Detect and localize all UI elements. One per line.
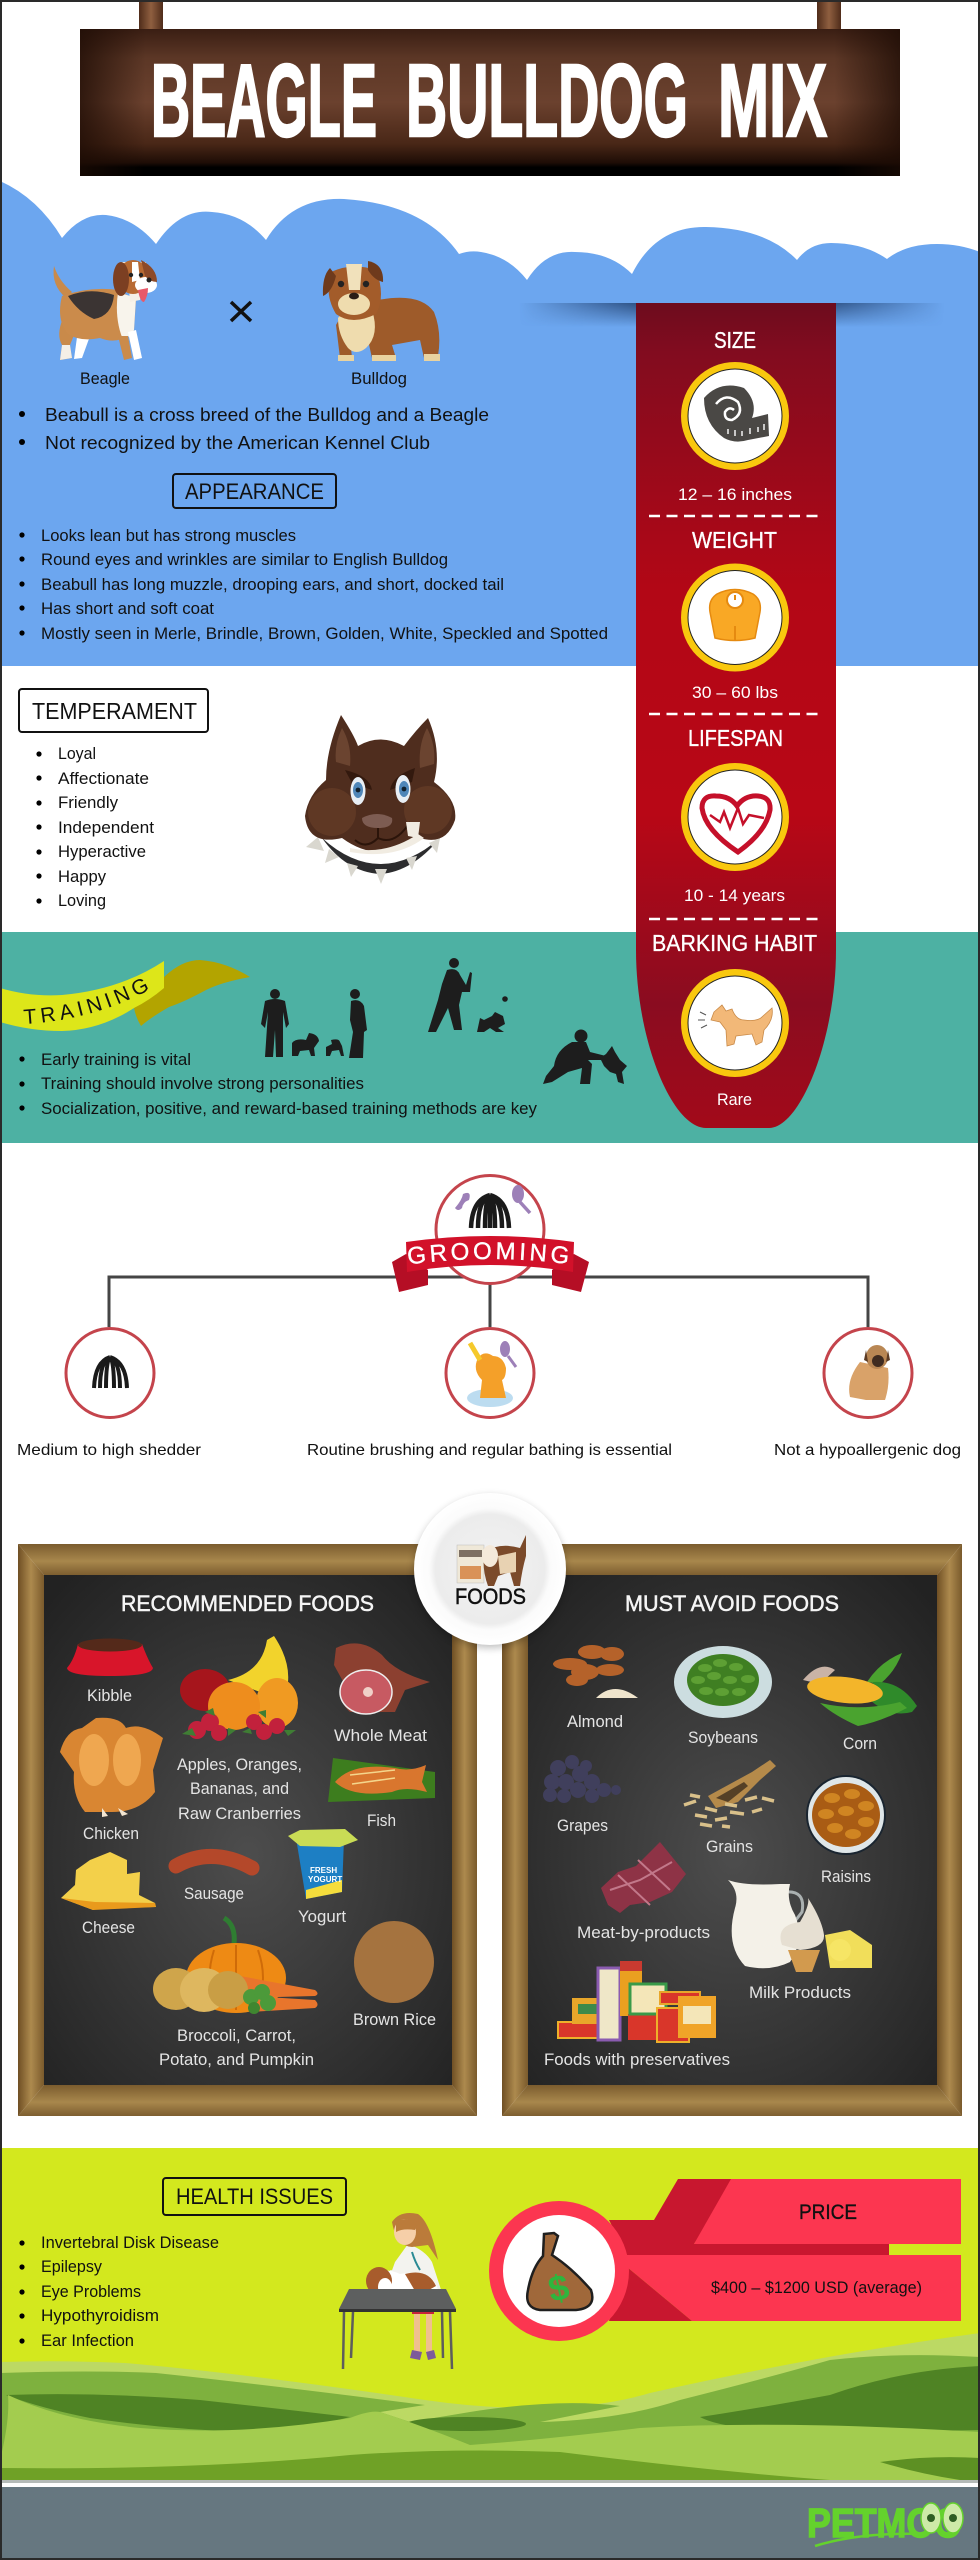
text block: temperament list: Happy <box>58 868 107 886</box>
label: milk products: Milk Products <box>749 1983 851 2002</box>
label: vegetables: Potato, and Pumpkin <box>159 2050 314 2069</box>
heading: health issues: HEALTH ISSUES <box>176 2184 333 2209</box>
label: yogurt: Yogurt <box>298 1907 346 1926</box>
food: yogurt cup: FRESH <box>310 1866 337 1875</box>
icon: grooming main circle <box>436 1176 544 1284</box>
text block: training list: Socialization, positive, and reward-based training methods are key <box>41 1100 538 1118</box>
heading: appearance <box>173 474 336 508</box>
label: meat by-products: Meat-by-products <box>577 1923 710 1942</box>
text block: training list: Early training is vital <box>41 1051 191 1069</box>
label: vegetables: Broccoli, Carrot, <box>177 2026 296 2045</box>
title: BEAGLE <box>151 43 377 158</box>
label: kibble: Kibble <box>87 1686 132 1705</box>
text block: health list: Eye Problems <box>41 2283 141 2301</box>
label: sausage: Sausage <box>184 1884 244 1903</box>
icon: puppy <box>482 1535 526 1586</box>
grooming item: brushing and bathing <box>307 1328 672 1459</box>
divider dashes <box>649 713 822 715</box>
food: almonds <box>553 1645 638 1698</box>
silhouette: man throwing ball <box>428 958 508 1032</box>
stat: size: SIZE <box>714 327 756 353</box>
food: cheese <box>61 1852 156 1910</box>
heading: appearance: APPEARANCE <box>185 479 324 504</box>
text block: appearance list <box>19 527 608 643</box>
ribbon body <box>636 303 836 1128</box>
panel: stats ribbon <box>519 303 944 1128</box>
panel: recommended foods board <box>18 1544 477 2116</box>
grooming item: not hypoallergenic: Not a hypoallergenic dog <box>774 1442 961 1459</box>
stat: barking habit <box>652 930 817 1109</box>
food: preserved goods <box>558 1961 716 2042</box>
label: fish: Fish <box>367 1811 396 1830</box>
heading: temperament: TEMPERAMENT <box>32 698 197 724</box>
food: fruit pile <box>180 1636 298 1741</box>
sign posts <box>139 0 841 30</box>
food: milk products <box>728 1880 872 1972</box>
label: grains: Grains <box>706 1837 753 1856</box>
label: cheese: Cheese <box>82 1918 135 1937</box>
lime background <box>0 2148 980 2480</box>
label: FOODS: FOODS <box>455 1584 526 1609</box>
text block: appearance list: Mostly seen in Merle, Brindle, Brown, Golden, White, Speckled and Spotted <box>41 625 608 643</box>
stat: barking habit: BARKING HABIT <box>652 930 817 956</box>
text block: health list <box>19 2234 219 2350</box>
icon: puppy food bag <box>457 1545 484 1583</box>
title: BULLDOG <box>406 43 688 158</box>
grooming ribbon banner <box>392 1236 589 1292</box>
text block: appearance list: Beabull has long muzzle, drooping ears, and short, docked tail <box>41 576 504 594</box>
text block: health list: Epilepsy <box>41 2258 103 2276</box>
price value: $400 – $1200 USD (average) <box>711 2279 922 2297</box>
label: brown rice: Brown Rice <box>353 2010 436 2029</box>
icon: tape measure <box>681 362 789 470</box>
label: fruit <box>177 1755 302 1823</box>
green hills <box>0 2333 980 2480</box>
text block: temperament list: Loving <box>58 892 106 910</box>
label: vegetables <box>159 2026 314 2069</box>
silhouette: man with dogs <box>261 989 367 1058</box>
label: corn: Corn <box>843 1734 877 1753</box>
icon: money bag circle <box>489 2201 629 2341</box>
chalkboard <box>44 1575 452 2085</box>
label: fruit: Bananas, and <box>190 1779 289 1798</box>
text block: intro bullets: Beabull is a cross breed of the Bulldog and a Beagle <box>45 404 489 425</box>
stat: lifespan: 10 - 14 years <box>684 886 785 905</box>
grooming item: not hypoallergenic <box>774 1328 961 1459</box>
text block: intro bullets <box>19 404 489 453</box>
label: fruit: Raw Cranberries <box>178 1804 301 1823</box>
food: vegetables <box>153 1918 318 2014</box>
food: raisins bowl <box>807 1776 885 1854</box>
text block: health list: Ear Infection <box>41 2332 134 2350</box>
icon: heart pulse <box>681 763 789 871</box>
label: chicken: Chicken <box>83 1824 139 1843</box>
training banner: TRAINING <box>23 979 148 1024</box>
icon: scale <box>681 564 789 672</box>
divider dashes <box>649 515 822 517</box>
wooden frame <box>502 1544 962 2116</box>
price heading: PRICE <box>799 2201 857 2224</box>
grooming item: shedder: Medium to high shedder <box>17 1442 202 1459</box>
food: grapes <box>543 1755 621 1803</box>
icon: money bag circle: $ <box>544 2266 573 2310</box>
label: Bulldog: Bulldog <box>351 370 407 388</box>
stat: size <box>678 327 792 504</box>
food: yogurt cup <box>288 1829 358 1899</box>
grooming item: brushing and bathing: Routine brushing and regular bathing is essential <box>307 1442 672 1459</box>
text block: temperament list: Independent <box>58 819 154 837</box>
text block: training list: Training should involve strong personalities <box>41 1075 364 1093</box>
blue cloud panel <box>0 181 980 666</box>
food: brown rice <box>354 1921 434 2003</box>
stat: barking habit: Rare <box>717 1090 752 1109</box>
food: sausage <box>176 1856 252 1868</box>
illustration: vet and dog on table <box>339 2213 456 2369</box>
title: MIX <box>718 43 827 158</box>
food: whole meat <box>334 1643 430 1714</box>
ribbon front <box>0 961 164 1031</box>
text block: appearance list: Has short and soft coat <box>41 600 214 618</box>
label: almond: Almond <box>567 1712 623 1731</box>
badge: foods plate <box>414 1493 566 1648</box>
grooming item: shedder <box>17 1328 202 1459</box>
label: preserved goods: Foods with preservatives <box>544 2050 730 2069</box>
food: soybeans bowl <box>674 1646 772 1718</box>
sign board <box>80 29 900 176</box>
heading: health issues <box>163 2178 346 2215</box>
grooming section <box>17 1174 961 1459</box>
icon: barking dog <box>681 969 789 1077</box>
text block: training list <box>19 1051 538 1118</box>
text block: temperament list: Friendly <box>58 794 119 812</box>
training banner <box>2 960 250 1031</box>
ribbon fold <box>134 960 250 1026</box>
footer band with logo <box>0 2480 980 2560</box>
text block: health list: Invertebral Disk Disease <box>41 2234 219 2252</box>
top shadow <box>528 303 936 326</box>
wooden frame <box>18 1544 477 2116</box>
label: soybeans: Soybeans <box>688 1728 758 1747</box>
icon: cross mark <box>231 302 251 321</box>
stat: weight <box>681 527 789 702</box>
text block: temperament list: Loyal <box>58 745 96 763</box>
label: Beagle: Beagle <box>80 370 130 388</box>
connector lines <box>109 1277 868 1327</box>
stat: lifespan <box>681 725 789 905</box>
divider dashes <box>649 918 822 920</box>
label: grapes: Grapes <box>557 1816 608 1835</box>
icon: angry dog head <box>305 715 455 884</box>
stat: weight: WEIGHT <box>692 527 777 553</box>
food: meat by-products <box>601 1842 686 1913</box>
teal training band <box>0 932 980 1143</box>
label: fruit: Apples, Oranges, <box>177 1755 302 1774</box>
stat: weight: 30 – 60 lbs <box>692 683 778 702</box>
hanging sign with title <box>80 0 900 176</box>
label: whole meat: Whole Meat <box>334 1726 427 1745</box>
TRAINING label <box>24 950 210 1024</box>
food: yogurt cup: YOGURT <box>308 1875 342 1884</box>
icon: bulldog <box>323 261 440 361</box>
icon: beagle <box>54 260 157 360</box>
heading: recommended foods: RECOMMENDED FOODS <box>121 1591 374 1616</box>
logo: PETMOO: PETMOO <box>807 2500 962 2546</box>
silhouettes: people and dogs <box>261 958 627 1084</box>
text block: appearance list: Round eyes and wrinkles are similar to English Bulldog <box>41 551 448 569</box>
label: raisins: Raisins <box>821 1867 871 1886</box>
panel: must avoid foods board <box>502 1544 962 2116</box>
text block: intro bullets: Not recognized by the American Kennel Club <box>45 432 430 453</box>
heading: must avoid foods: MUST AVOID FOODS <box>625 1591 839 1616</box>
food: chicken <box>60 1718 163 1817</box>
title <box>151 43 827 158</box>
food: kibble bowl <box>67 1638 153 1676</box>
text block: appearance list: Looks lean but has strong muscles <box>41 527 296 545</box>
text block: temperament list: Hyperactive <box>58 843 146 861</box>
text block: temperament list: Affectionate <box>58 770 149 788</box>
heading: temperament <box>19 689 208 732</box>
price banner <box>489 2179 961 2341</box>
food: grains scoop <box>684 1760 776 1827</box>
panel: health and price <box>0 2148 980 2480</box>
silhouette: kneeling trainer with dog <box>543 1030 627 1084</box>
banner shapes <box>609 2179 961 2321</box>
stat: lifespan: LIFESPAN <box>688 725 783 751</box>
text block: health list: Hypothyroidism <box>41 2307 159 2325</box>
grooming ribbon banner: GROOMING <box>408 1242 568 1264</box>
text block: temperament list <box>36 745 154 910</box>
food: corn <box>803 1653 917 1726</box>
chalkboard <box>528 1575 937 2085</box>
stat: size: 12 – 16 inches <box>678 485 792 504</box>
food: fish on leaf <box>328 1758 435 1802</box>
